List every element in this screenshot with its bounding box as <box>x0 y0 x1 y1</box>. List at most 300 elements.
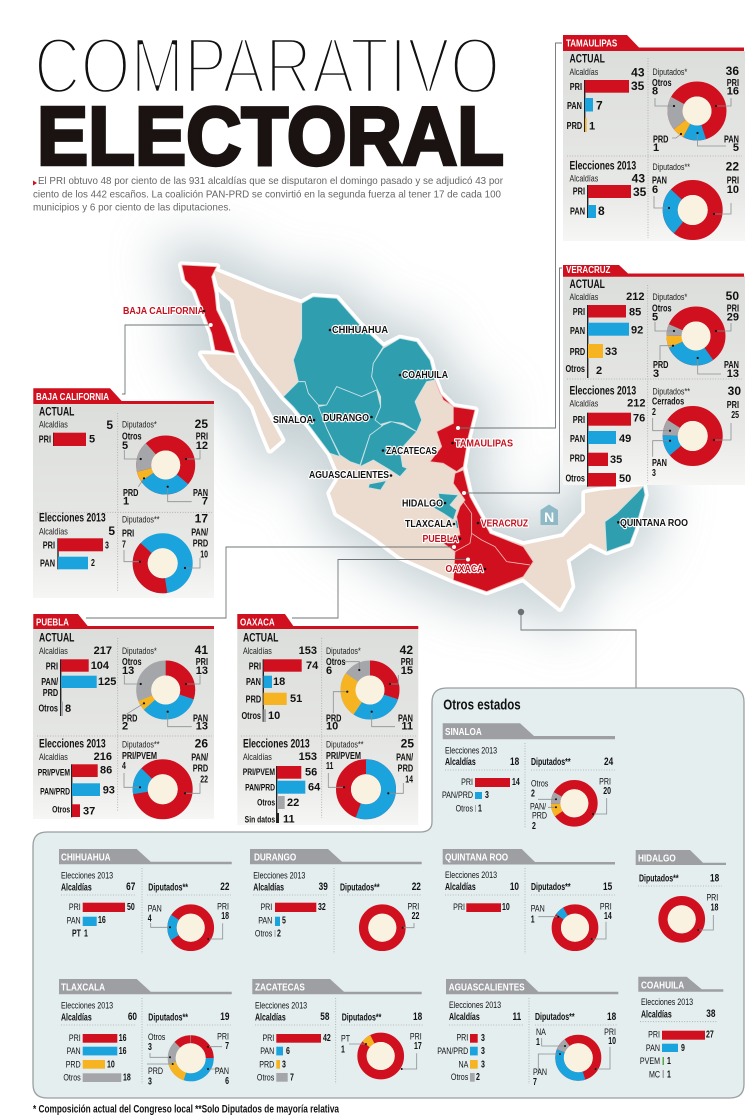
bar chart: alcaldías actual: PRD <box>567 120 583 131</box>
donut: diputados actual: PAN <box>724 133 739 145</box>
bar chart: alcaldías 2013: 49 <box>619 433 631 445</box>
bar chart: alcaldías 2013: 35 <box>633 185 647 199</box>
donut: diputados actual: 5 <box>122 440 128 452</box>
bar chart: alcaldías actual: PRI <box>39 433 51 445</box>
panel: otros estados <box>33 688 744 1098</box>
map state labels <box>123 306 688 575</box>
donut: diputados actual <box>122 643 208 732</box>
bar chart: alcaldías actual: Alcaldías <box>243 645 272 656</box>
label: Coahuila: COAHUILA <box>402 370 449 381</box>
donut: Hidalgo: Diputados** <box>639 872 679 884</box>
donut: diputados actual: 13 <box>196 720 208 732</box>
label: Aguascalientes: AGUASCALIENTES <box>309 470 389 481</box>
bar chart: Tlaxcala: Otros <box>63 1072 81 1083</box>
bar chart: alcaldías actual: 5 <box>106 418 113 432</box>
bar chart: alcaldías 2013: Alcaldías <box>39 751 68 762</box>
donut: Durango <box>340 881 421 946</box>
tab: Tlaxcala <box>59 979 232 994</box>
donut: Tlaxcala: PAN <box>215 1065 229 1076</box>
tab: Quintana Roo <box>443 849 615 864</box>
tab: Tamaulipas <box>563 35 744 51</box>
bar chart: Coahuila: PRI <box>648 1029 660 1040</box>
donut: diputados actual: 6 <box>326 665 332 677</box>
donut: diputados 2013: PRI <box>727 174 739 186</box>
donut: diputados actual: 1 <box>123 496 129 508</box>
donut: Tlaxcala: 3 <box>148 1041 152 1052</box>
donut: diputados actual: 29 <box>727 312 739 324</box>
heading: elecciones 2013: Elecciones 2013 <box>570 160 636 173</box>
donut: diputados 2013: PAN <box>652 174 667 186</box>
bar chart: alcaldías actual: Alcaldías <box>39 419 68 430</box>
donut: diputados 2013: PRI/PVEM <box>326 750 361 761</box>
bar chart: alcaldías actual <box>38 645 116 716</box>
bar chart: alcaldías actual: Otros <box>241 710 261 721</box>
donut: diputados 2013: 22 <box>200 773 208 785</box>
bar chart: Aguascalientes: Alcaldías <box>449 1011 480 1022</box>
state: Aguascalientes <box>437 979 618 1087</box>
bar chart: Tlaxcala: 16 <box>119 1032 127 1043</box>
state: Sinaloa <box>442 723 615 831</box>
bar chart: alcaldías 2013 <box>570 172 647 218</box>
bar chart: alcaldías actual: 18 <box>273 676 285 688</box>
donut: diputados 2013: 7 <box>122 538 126 550</box>
state: Quintana Roo <box>443 849 615 954</box>
bar chart: Chihuahua: PRI <box>69 901 81 912</box>
bar chart: Aguascalientes: 11 <box>512 1011 522 1023</box>
heading: actual: ACTUAL <box>39 407 75 419</box>
bar chart: alcaldías actual: 35 <box>631 79 645 93</box>
bar chart: alcaldías actual: PRI <box>570 81 582 92</box>
tab: Aguascalientes <box>446 979 618 994</box>
bar chart: Coahuila: 1 <box>667 1068 671 1080</box>
donut: diputados 2013: 25 <box>401 736 414 750</box>
bar chart: alcaldías 2013: PAN <box>40 557 55 569</box>
tab: Chihuahua: CHIHUAHUA <box>61 851 111 863</box>
bar chart: alcaldías actual: PRD <box>570 346 586 357</box>
bar chart: alcaldías actual: 1 <box>589 120 595 132</box>
bar chart: alcaldías actual: 212 <box>626 291 644 303</box>
donut: diputados 2013: 26 <box>195 736 208 750</box>
donut: Chihuahua: 18 <box>221 910 229 921</box>
bar chart: alcaldías actual <box>241 645 319 722</box>
state: Durango <box>250 849 422 954</box>
bar chart: alcaldías actual <box>567 66 645 132</box>
bar chart: Sinaloa: PRI <box>461 776 473 787</box>
donut: Sinaloa: Otros <box>531 778 548 789</box>
donut: Sinaloa: 24 <box>604 756 614 768</box>
bar chart: Coahuila: Alcaldías <box>641 1008 672 1020</box>
donut: diputados actual: PRD <box>653 359 669 370</box>
bar chart: alcaldías 2013: 43 <box>632 172 645 186</box>
bar chart: alcaldías 2013: PAN <box>570 205 585 217</box>
donut: Sinaloa: PAN/ <box>530 800 547 812</box>
tab: Puebla <box>33 614 214 629</box>
donut: diputados actual: Otros <box>652 303 672 314</box>
donut: diputados actual: PRD <box>326 713 342 724</box>
donut: diputados actual: 41 <box>195 643 208 657</box>
label: Sinaloa: SINALOA <box>273 415 314 426</box>
bar chart: alcaldías actual: 92 <box>631 324 643 336</box>
tab: Coahuila: COAHUILA <box>641 978 684 991</box>
map dots <box>209 323 524 615</box>
donut: diputados 2013: PRD <box>398 763 414 774</box>
donut: diputados 2013: 14 <box>405 773 413 785</box>
bar chart: alcaldías 2013: 2 <box>91 557 95 568</box>
bar chart: Aguascalientes: Elecciones 2013 <box>449 999 501 1010</box>
bar chart: Tlaxcala: Alcaldías <box>61 1011 92 1023</box>
bar chart: Chihuahua: Elecciones 2013 <box>61 869 113 881</box>
panel: Puebla <box>33 614 214 819</box>
donut: diputados actual: PAN <box>193 487 208 498</box>
donut: Quintana Roo <box>531 881 613 946</box>
bar chart: Durango: Otros <box>255 928 272 939</box>
donut: Zacatecas <box>341 1011 423 1075</box>
bar chart: Durango <box>253 869 328 939</box>
donut: Hidalgo: 18 <box>711 901 719 913</box>
donut: diputados actual: 3 <box>653 368 659 380</box>
donut: diputados actual: 42 <box>400 643 413 657</box>
bar chart: alcaldías 2013: PRI/PVEM <box>243 767 275 777</box>
donut: Quintana Roo: 14 <box>604 910 612 921</box>
donut: Chihuahua: PRI <box>217 900 229 912</box>
donut: diputados 2013: PRI/PVEM <box>122 750 157 761</box>
bar chart: alcaldías 2013: 35 <box>610 454 622 466</box>
donut: Aguascalientes: Diputados** <box>535 1011 575 1022</box>
bar chart: Durango: 2 <box>277 927 281 939</box>
donut: diputados 2013 <box>326 736 414 812</box>
bar chart: Zacatecas: 42 <box>323 1032 331 1043</box>
donut: Chihuahua: PAN <box>148 903 162 914</box>
state: Chihuahua <box>59 849 232 954</box>
donut: Zacatecas: PT <box>341 1033 350 1044</box>
tab: Oaxaca <box>237 614 418 629</box>
donut: Quintana Roo: Diputados** <box>531 881 571 892</box>
donut: Chihuahua: 4 <box>148 912 152 924</box>
bar chart: alcaldías 2013: 153 <box>299 751 317 763</box>
bar chart: alcaldías actual: PRD <box>43 687 59 698</box>
intro text <box>33 175 503 214</box>
donut: diputados actual: 5 <box>652 312 658 324</box>
icon: north marker: N <box>544 509 554 525</box>
bar chart: Zacatecas: PRD <box>259 1059 274 1070</box>
bar chart: Sinaloa: 3 <box>485 789 489 800</box>
heading: elecciones 2013: Elecciones 2013 <box>243 738 310 751</box>
panel: Baja California <box>33 388 214 598</box>
label: Tlaxcala: TLAXCALA <box>405 519 453 530</box>
bar chart: alcaldías actual: Otros <box>38 703 58 714</box>
donut: diputados actual: 36 <box>726 64 739 78</box>
label: Chihuahua: CHIHUAHUA <box>332 325 389 336</box>
bar chart: Coahuila: PAN <box>646 1042 660 1053</box>
heading: elecciones 2013: Elecciones 2013 <box>39 513 106 525</box>
bar chart: alcaldías actual: 43 <box>631 66 645 80</box>
tab: Zacatecas <box>252 979 422 994</box>
donut: Tlaxcala: 3 <box>148 1075 152 1087</box>
donut: Hidalgo <box>639 872 720 938</box>
tab: Tamaulipas: TAMAULIPAS <box>566 38 617 49</box>
donut: diputados actual: 13 <box>122 665 134 677</box>
bar chart: alcaldías 2013: PAN/PRD <box>40 786 70 797</box>
donut: diputados 2013: Cerrados <box>652 395 684 407</box>
donut: Aguascalientes: 7 <box>533 1076 537 1087</box>
label: Quintana Roo: QUINTANA ROO <box>620 518 688 529</box>
bar chart: alcaldías 2013: Alcaldías <box>570 173 598 184</box>
donut: diputados actual <box>652 289 739 380</box>
panel: Oaxaca <box>237 614 418 826</box>
donut: diputados 2013: PRD <box>193 538 209 549</box>
bar chart: alcaldías actual: 2 <box>596 365 602 377</box>
donut: diputados actual: PAN <box>398 713 413 724</box>
bar chart: alcaldías 2013: PRI <box>573 414 585 425</box>
donut: diputados actual: PRI <box>401 656 413 667</box>
donut: diputados actual: 16 <box>727 86 739 98</box>
bar chart: alcaldías 2013: PRD <box>570 453 586 464</box>
bar chart: Aguascalientes: PRI <box>456 1032 468 1043</box>
teal states <box>283 297 645 552</box>
title line: comparativo: COMPARATIVO <box>34 21 500 110</box>
bar chart: alcaldías actual: PAN/ <box>41 676 59 687</box>
bar chart: Sinaloa: Alcaldías <box>445 756 476 767</box>
bar chart: Tlaxcala: 16 <box>119 1045 127 1056</box>
bar chart: alcaldías 2013: PAN <box>570 433 585 444</box>
bar chart: alcaldías actual: PRI <box>46 660 58 672</box>
donut: diputados 2013: PAN/ <box>191 752 209 763</box>
bar chart: alcaldías 2013: PRI <box>573 185 585 197</box>
bar chart: alcaldías actual: PAN <box>246 676 261 687</box>
label: Oaxaca: OAXACA <box>446 564 484 575</box>
donut: diputados actual: Diputados* <box>326 645 361 656</box>
label: Zacatecas: ZACATECAS <box>386 446 437 457</box>
bar chart: alcaldías actual: 153 <box>299 645 317 657</box>
donut: diputados actual: PAN <box>193 713 208 724</box>
donut: diputados 2013: PAN/ <box>191 527 209 538</box>
donut: diputados actual: PRI <box>727 303 739 314</box>
bar chart: alcaldías actual: 217 <box>94 645 112 657</box>
bar chart: Tlaxcala: 18 <box>123 1071 131 1083</box>
donut: diputados actual: 50 <box>726 289 739 303</box>
bar chart: Zacatecas: Otros <box>257 1072 274 1083</box>
bar chart: alcaldías 2013: Otros <box>52 805 71 815</box>
bar chart: Chihuahua <box>61 869 135 939</box>
footnote: * Composición actual del Congreso local **Solo Diputados de mayoría relativa <box>33 1104 340 1116</box>
bar chart: Quintana Roo <box>445 869 519 912</box>
donut: diputados 2013 <box>652 160 739 232</box>
donut: Tlaxcala: 7 <box>225 1040 229 1051</box>
tab: Baja California <box>33 388 214 404</box>
label: Hidalgo: HIDALGO <box>402 498 443 510</box>
bar chart: Tlaxcala: PAN <box>67 1045 81 1056</box>
title line: electoral: ELECTORAL <box>37 90 504 182</box>
donut: diputados 2013: 2 <box>652 406 656 417</box>
donut: diputados 2013: 30 <box>728 384 741 398</box>
bar chart: Zacatecas: PAN <box>260 1045 274 1056</box>
bar chart: Coahuila: MC <box>649 1068 660 1080</box>
bar chart: alcaldías 2013: 64 <box>308 782 321 794</box>
donut: Quintana Roo: 1 <box>531 913 535 925</box>
bar chart: alcaldías actual: 85 <box>629 306 641 318</box>
bar chart: Tlaxcala: 10 <box>107 1058 115 1070</box>
donut: Quintana Roo: PRI <box>600 900 612 912</box>
donut: diputados actual: 8 <box>652 86 658 98</box>
map of Mexico <box>182 265 645 608</box>
bar chart: Durango: PAN <box>258 914 272 926</box>
bar chart: alcaldías 2013: Alcaldías <box>243 751 272 762</box>
bar chart: alcaldías actual: 104 <box>91 660 110 672</box>
bar chart: Zacatecas: PRI <box>262 1032 274 1043</box>
state: Coahuila <box>638 977 723 1080</box>
bar chart: alcaldías 2013: 56 <box>305 767 317 779</box>
bar chart: Tlaxcala: PRI <box>69 1032 81 1043</box>
bar chart: Zacatecas: 6 <box>286 1045 290 1056</box>
donut: diputados actual: Otros <box>122 430 142 442</box>
donut: diputados actual: Diputados* <box>122 645 157 656</box>
donut: Aguascalientes: 1 <box>536 1036 540 1047</box>
bar chart: Sinaloa: 14 <box>512 776 520 787</box>
donut: diputados actual: PRI <box>196 656 208 667</box>
state: Hidalgo <box>636 850 726 938</box>
donut: Tlaxcala: 19 <box>220 1011 230 1023</box>
donut: diputados 2013: PRD <box>193 763 209 774</box>
donut: Aguascalientes: 18 <box>607 1011 617 1023</box>
tab: Hidalgo: HIDALGO <box>638 852 676 864</box>
donut: diputados 2013: 6 <box>652 184 658 196</box>
tab: Veracruz: VERACRUZ <box>566 264 611 275</box>
donut: diputados actual: PAN <box>724 359 739 370</box>
donut: Sinaloa: 2 <box>531 787 535 799</box>
heading: actual: ACTUAL <box>243 633 279 645</box>
donut: Tlaxcala: Diputados** <box>148 1011 188 1023</box>
heading: actual: ACTUAL <box>39 633 75 645</box>
bar chart: Sinaloa <box>442 744 520 814</box>
bar chart: Durango: 5 <box>282 914 286 926</box>
bar chart: Sinaloa: 1 <box>478 802 482 814</box>
bar chart: alcaldías 2013: Alcaldías <box>39 525 68 537</box>
bar chart: Aguascalientes: PAN/PRD <box>437 1045 468 1056</box>
red states <box>182 265 533 592</box>
bar chart: Sinaloa: 18 <box>510 756 520 768</box>
bar chart: alcaldías actual <box>39 418 113 446</box>
label: Veracruz: VERACRUZ <box>481 518 528 530</box>
bar chart: Tlaxcala: Elecciones 2013 <box>61 999 113 1011</box>
donut: Chihuahua: 22 <box>220 881 230 893</box>
bar chart: Coahuila: Elecciones 2013 <box>641 996 693 1007</box>
tab: Durango: DURANGO <box>254 851 296 863</box>
title <box>34 21 504 182</box>
donut: diputados 2013: PRI <box>727 399 739 410</box>
tab: Zacatecas: ZACATECAS <box>255 981 305 993</box>
bar chart: Zacatecas: 7 <box>290 1071 294 1083</box>
bar chart: alcaldías 2013: 37 <box>83 805 95 817</box>
donut: diputados 2013: Diputados** <box>653 161 691 172</box>
tab: Durango <box>250 849 422 864</box>
bar chart: alcaldías actual: Alcaldías <box>570 66 598 77</box>
bar chart: Durango: 32 <box>318 901 326 912</box>
bar chart: alcaldías actual: 33 <box>605 346 617 358</box>
bar chart: alcaldías 2013: 86 <box>100 764 112 776</box>
bar chart: Coahuila: 27 <box>706 1028 714 1040</box>
donut: Tlaxcala: Otros <box>148 1031 165 1042</box>
tab: Aguascalientes: AGUASCALIENTES <box>449 981 525 993</box>
donut: diputados actual <box>122 417 208 508</box>
bar chart: Chihuahua: 50 <box>127 901 135 912</box>
bar chart: Aguascalientes: 3 <box>481 1045 485 1056</box>
bar chart: alcaldías 2013: PRI/PVEM <box>38 768 70 778</box>
donut: diputados actual: PRI <box>727 77 739 88</box>
label: Puebla: PUEBLA <box>422 534 459 545</box>
donut: Durango: 22 <box>412 910 420 921</box>
donut: diputados actual: Diputados* <box>653 66 688 77</box>
donut: Tlaxcala: PRD <box>148 1065 163 1076</box>
donut: diputados actual: 2 <box>122 720 128 732</box>
donut: diputados 2013 <box>652 384 741 478</box>
bar chart: Zacatecas: 58 <box>320 1011 330 1023</box>
bar chart: Aguascalientes <box>437 999 522 1082</box>
bar chart: alcaldías actual: Alcaldías <box>39 645 68 656</box>
heading: otros estados: Otros estados <box>443 696 521 713</box>
donut: Sinaloa <box>530 756 614 831</box>
donut: diputados 2013: 4 <box>122 760 126 771</box>
donut: Chihuahua <box>148 881 230 946</box>
bar chart: Coahuila <box>640 996 716 1080</box>
bar chart: alcaldías actual: 74 <box>306 660 319 672</box>
donut: diputados actual: PRD <box>653 133 669 145</box>
tab: Oaxaca: OAXACA <box>240 617 275 628</box>
donut: diputados actual: PRD <box>123 487 139 498</box>
bar chart: Zacatecas: Elecciones 2013 <box>255 999 307 1011</box>
donut: Sinaloa: Diputados** <box>531 756 571 767</box>
bar chart: Durango: PRI <box>260 901 272 912</box>
tab: Veracruz <box>563 264 744 277</box>
donut: Tlaxcala: 6 <box>225 1075 229 1086</box>
bar chart: Aguascalientes: 2 <box>476 1071 480 1082</box>
tab: Chihuahua <box>59 849 232 864</box>
donut: diputados actual: Otros <box>326 656 346 667</box>
bar chart: alcaldías 2013: 3 <box>105 539 109 551</box>
donut: diputados actual: 1 <box>653 142 659 154</box>
panel: Tamaulipas <box>563 35 745 241</box>
tab: Sinaloa <box>443 723 615 739</box>
intro text: El PRI obtuvo 48 por ciento de las 931 alcaldías que se disputaron el domingo pasado y se adjudicó 43 por <box>38 175 503 187</box>
donut: diputados 2013 <box>122 736 209 812</box>
label dots <box>203 310 620 570</box>
tab: Puebla: PUEBLA <box>36 617 69 628</box>
bar chart: alcaldías 2013: Sin datos <box>245 815 275 825</box>
bar chart: Sinaloa: Otros <box>456 803 473 814</box>
bar chart: alcaldías 2013: PAN/PRD <box>245 783 275 793</box>
donut: Zacatecas: 17 <box>414 1040 422 1051</box>
bar chart: alcaldías 2013: 5 <box>108 524 115 538</box>
donut: diputados 2013: 17 <box>195 512 208 526</box>
bar chart: alcaldías actual: 125 <box>98 676 116 688</box>
bar chart: Chihuahua: 16 <box>98 914 106 925</box>
intro text: ciento de los 442 escaños. La coalición PAN-PRD se convirtió en la segunda fuerza al tener 17 de cada 100 <box>33 188 501 200</box>
bar chart: Quintana Roo: Alcaldías <box>445 881 476 892</box>
donut: diputados 2013: PAN <box>652 457 667 468</box>
label: Tamaulipas: TAMAULIPAS <box>455 438 513 450</box>
donut: diputados actual: 12 <box>196 440 208 452</box>
bar chart: alcaldías 2013: 8 <box>598 204 605 218</box>
panel: Veracruz <box>563 264 745 487</box>
bar chart: Zacatecas: Alcaldías <box>255 1011 286 1023</box>
donut: diputados actual: 5 <box>733 142 739 154</box>
donut: diputados 2013 <box>122 512 209 586</box>
donut: Aguascalientes: PRI <box>604 1026 616 1037</box>
bar chart: Zacatecas <box>255 999 331 1083</box>
donut: Durango: 22 <box>412 881 421 893</box>
bar chart: Durango: 39 <box>319 881 328 893</box>
bar chart: alcaldías 2013 <box>565 398 646 487</box>
donut: diputados actual: 7 <box>202 496 208 508</box>
